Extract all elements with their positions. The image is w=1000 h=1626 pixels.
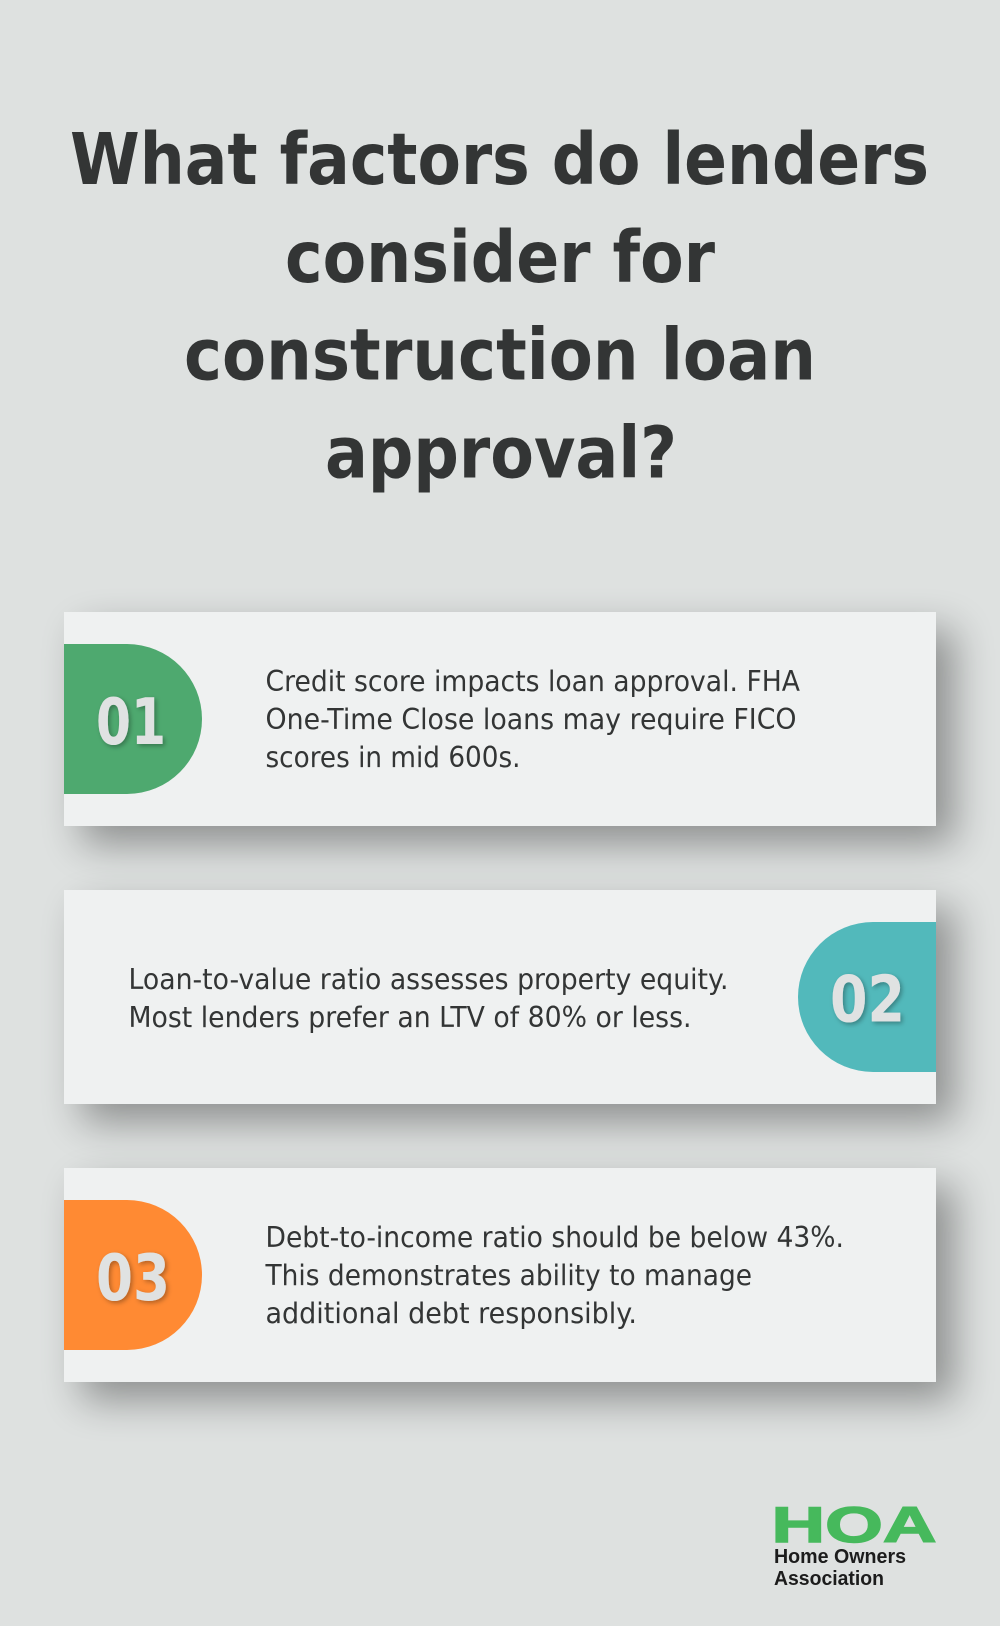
text: debt-to-income [265, 1220, 844, 1330]
text: debt-to-income: additional debt responsibly. [266, 1296, 637, 1330]
logo: Home Owners Association [772, 1497, 936, 1590]
badge: 03: 03 [96, 1242, 170, 1316]
badge: 02 [798, 922, 936, 1072]
text: credit score: One-Time Close loans may require FICO [266, 702, 796, 736]
panel: factor 3 debt-to-income [64, 1168, 954, 1400]
text: loan-to-value [128, 962, 728, 1034]
logo: Home Owners Association: HOA [772, 1497, 936, 1553]
text: credit score: scores in mid 600s. [266, 740, 520, 774]
title: approval? [325, 412, 677, 494]
text: loan-to-value: Most lenders prefer an LTV of 80% or less. [128, 1000, 692, 1034]
title: consider for [285, 216, 715, 299]
badge: 03 [64, 1200, 202, 1350]
badge: 01: 01 [96, 686, 166, 760]
text: debt-to-income: Debt-to-income ratio should be below 43%. [266, 1220, 844, 1254]
title: construction loan [184, 314, 816, 396]
panel: factor 1 credit score [64, 612, 954, 844]
text: credit score [266, 664, 800, 774]
title [70, 118, 929, 494]
logo: Home Owners Association: Home Owners [774, 1546, 906, 1568]
text: credit score: Credit score impacts loan approval. FHA [266, 664, 800, 698]
logo: Home Owners Association: Association [774, 1568, 884, 1590]
text: loan-to-value: Loan-to-value ratio assesses property equity. [128, 962, 728, 996]
text: debt-to-income: This demonstrates ability to manage [265, 1258, 752, 1292]
panel: factor 2 loan-to-value [64, 890, 954, 1122]
badge: 02: 02 [830, 964, 905, 1038]
badge: 01 [64, 644, 202, 794]
